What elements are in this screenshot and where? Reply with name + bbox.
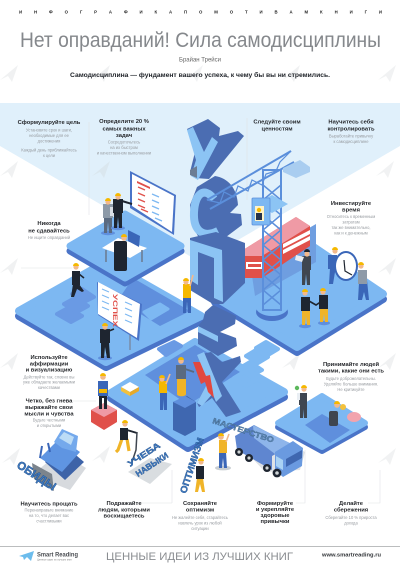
text: set a goal: Сформулируйте цель [18,119,81,126]
text: self control [327,118,375,144]
platform: left large [19,262,201,367]
text: affirmations: Действуйте так, словно вы [24,374,74,380]
text: optimism: Сохраняйте [183,500,218,507]
text: optimism [172,500,228,531]
text: affirmations: аффирмации [30,360,69,368]
text: accept people: такими, какие они есть [318,368,384,374]
text: affirmations: и визуализацию [26,368,72,374]
text: self control: Выработайте привычку [329,134,374,138]
text: imitate: людям, которыми [98,508,150,514]
letter С [190,176,242,240]
text: express feelings: мысли и чувства [24,412,74,418]
yellow box [121,382,139,396]
text: 20 percent tasks [97,119,151,156]
text: savings: Делайте [339,500,364,507]
text: affirmations: качествами [38,385,60,390]
text: 20 percent tasks: Определите 20 % [99,119,149,125]
text: affirmations [23,354,75,390]
text: accept people: Принимайте людей [323,361,379,368]
text: set a goal: Каждый день приближайтесь [21,148,77,152]
steps between platforms [57,289,278,386]
dump truck [235,425,305,477]
text: imitate [98,500,150,520]
text: 20 percent tasks: самых важных [102,126,146,132]
text: habits: здоровые [261,513,290,519]
label on bulldozer: ОБИДЫ: ОБИДЫ [14,459,58,493]
text: optimism: Не жалейте себя, старайтесь [172,515,228,520]
label on pallet: УЧЕБА НАВЫКИ [126,440,172,484]
text: invest time: как и к денежным [334,230,368,236]
website: www.smartreading.ru [321,552,381,558]
text: never give up: не сдавайтесь [28,228,70,234]
label on pallet: УЧЕБА НАВЫКИ: УЧЕБА [126,440,162,469]
person: reading plan [295,249,311,285]
text: set a goal: достижения [38,138,60,144]
text: never give up: Никогда [37,221,61,227]
two workers handshake [299,288,330,328]
label: МАСТЕРСТВО: МАСТЕРСТВО [211,416,275,445]
text: habits: Формируйте [257,500,294,507]
text: self control: контролировать [327,126,375,132]
label on pallet: УЧЕБА НАВЫКИ: НАВЫКИ [134,450,170,479]
text: set a goal: к цели [43,153,55,158]
text: set a goal: Установите срок и шаги, [26,128,72,132]
board: affirmations УСПЕХ: УСПЕХ [111,294,118,328]
text: affirmations: Используйте [30,354,68,361]
person: engineer with plan [101,198,116,235]
person: worker raising hands [183,275,193,313]
text: accept people: Будьте доброжелательны. [326,376,376,381]
text: express feelings: Четко, без гнева [26,398,73,404]
text: forgive [20,502,78,524]
text: values: Следуйте своим [253,118,301,126]
text: set a goal [18,119,81,158]
text: set a goal: необходимые для ее [29,133,70,138]
text: habits [256,500,295,525]
person: pointing engineer [111,193,132,230]
text: optimism: ситуации [191,526,209,531]
subtitle: Самодисциплина — фундамент вашего успеха, к чему бы вы ни стремились. [70,71,330,79]
footer slogan: ЦЕННЫЕ ИДЕИ ИЗ ЛУЧШИХ КНИГ [106,551,293,563]
crane base [256,298,288,321]
text: express feelings [24,398,74,428]
series label: И Н Ф О Г Р А Ф И К А П О М О Т И В А М К Н И Г И [19,10,382,14]
text: forgive: на то, что делает вас [29,513,69,518]
worker with pallet jack [116,420,137,462]
text: invest time [327,200,375,236]
text: 20 percent tasks: Сосредоточьтесь [108,140,140,144]
text: habits: привычки [261,519,290,525]
letter П [190,232,245,304]
text: values [253,118,301,132]
worker and piggy bank [329,401,361,426]
clock with two workers [328,247,369,300]
text: forgive: Перенаправьте внимание [25,508,74,512]
board: affirmations УСПЕХ [97,282,142,350]
text: 20 percent tasks: и качественном выполнении [97,150,151,156]
letter Е [198,305,237,356]
text: imitate: Подражайте [106,500,142,507]
text: invest time: время [342,208,360,214]
icon: logo plane [19,551,34,561]
light blue chevron background [0,103,400,262]
board: priorities [130,171,176,235]
text: accept people [318,361,384,392]
text: never give up: Не ищите оправданий [28,235,70,240]
person: raising tool [159,374,170,410]
text: express feelings: выражайте свои [25,404,73,411]
text: values: ценностям [262,126,292,132]
desk with laptop and worker [102,230,147,271]
text: accept people: Не критикуйте [337,387,365,392]
text: optimism: извлечь урок из любой [178,520,222,526]
text: never give up [28,221,70,240]
text: invest time: так же внимательно, [331,225,371,230]
text: savings: сбережения [334,506,368,514]
text: express feelings: и открытыми [37,423,61,428]
logo text [37,552,78,562]
letter У [187,119,244,180]
worker holding word [195,458,205,492]
text: accept people: Уделяйте больше внимания. [324,382,378,386]
text: savings: Сберегайте 10 % прироста [325,515,377,520]
text: forgive: счастливыми [36,518,62,524]
text: invest time: затратам [342,220,360,224]
text: habits: и укрепляйте [256,506,295,513]
text: invest time: Инвестируйте [331,200,372,207]
text: invest time: Относитесь к временным [327,214,375,219]
person: at board [98,323,114,360]
platform: right small [278,396,365,451]
logo text: Ценные идеи из лучших книг [37,558,72,562]
platform: right large [215,238,383,352]
crane [207,151,310,310]
label: ОПТИМИЗМ: ОПТИМИЗМ [178,436,207,495]
platform: lower centre [111,342,284,448]
text: express feelings: Будьте честными [33,418,65,422]
text: forgive: Научитесь прощать [20,502,78,508]
text: imitate: восхищаетесь [104,514,145,520]
person: on red pedestal with camera [91,373,117,430]
text: savings: дохода [344,520,358,526]
text: self control: к самодисциплине [333,139,369,144]
text: 20 percent tasks: на их быстром [110,145,138,150]
letter Х [197,352,241,417]
text: savings [325,500,377,526]
red lightning crack [193,362,214,398]
text: 20 percent tasks: задач [116,133,132,139]
worker lifting word [215,433,231,470]
person: climbing steps [71,263,84,297]
author: Брайан Трейси [179,56,221,64]
platform: upper left [70,214,181,283]
text: affirmations: уже обладаете желаемыми [23,380,75,384]
person: on blue pedestal [173,357,196,436]
bulldozer [32,429,86,491]
logo text: Smart Reading [37,552,78,558]
text: optimism: оптимизм [186,508,214,514]
person: holding plant [295,385,307,418]
text: self control: Научитесь себя [328,118,374,126]
excavator: red machine [243,217,316,296]
